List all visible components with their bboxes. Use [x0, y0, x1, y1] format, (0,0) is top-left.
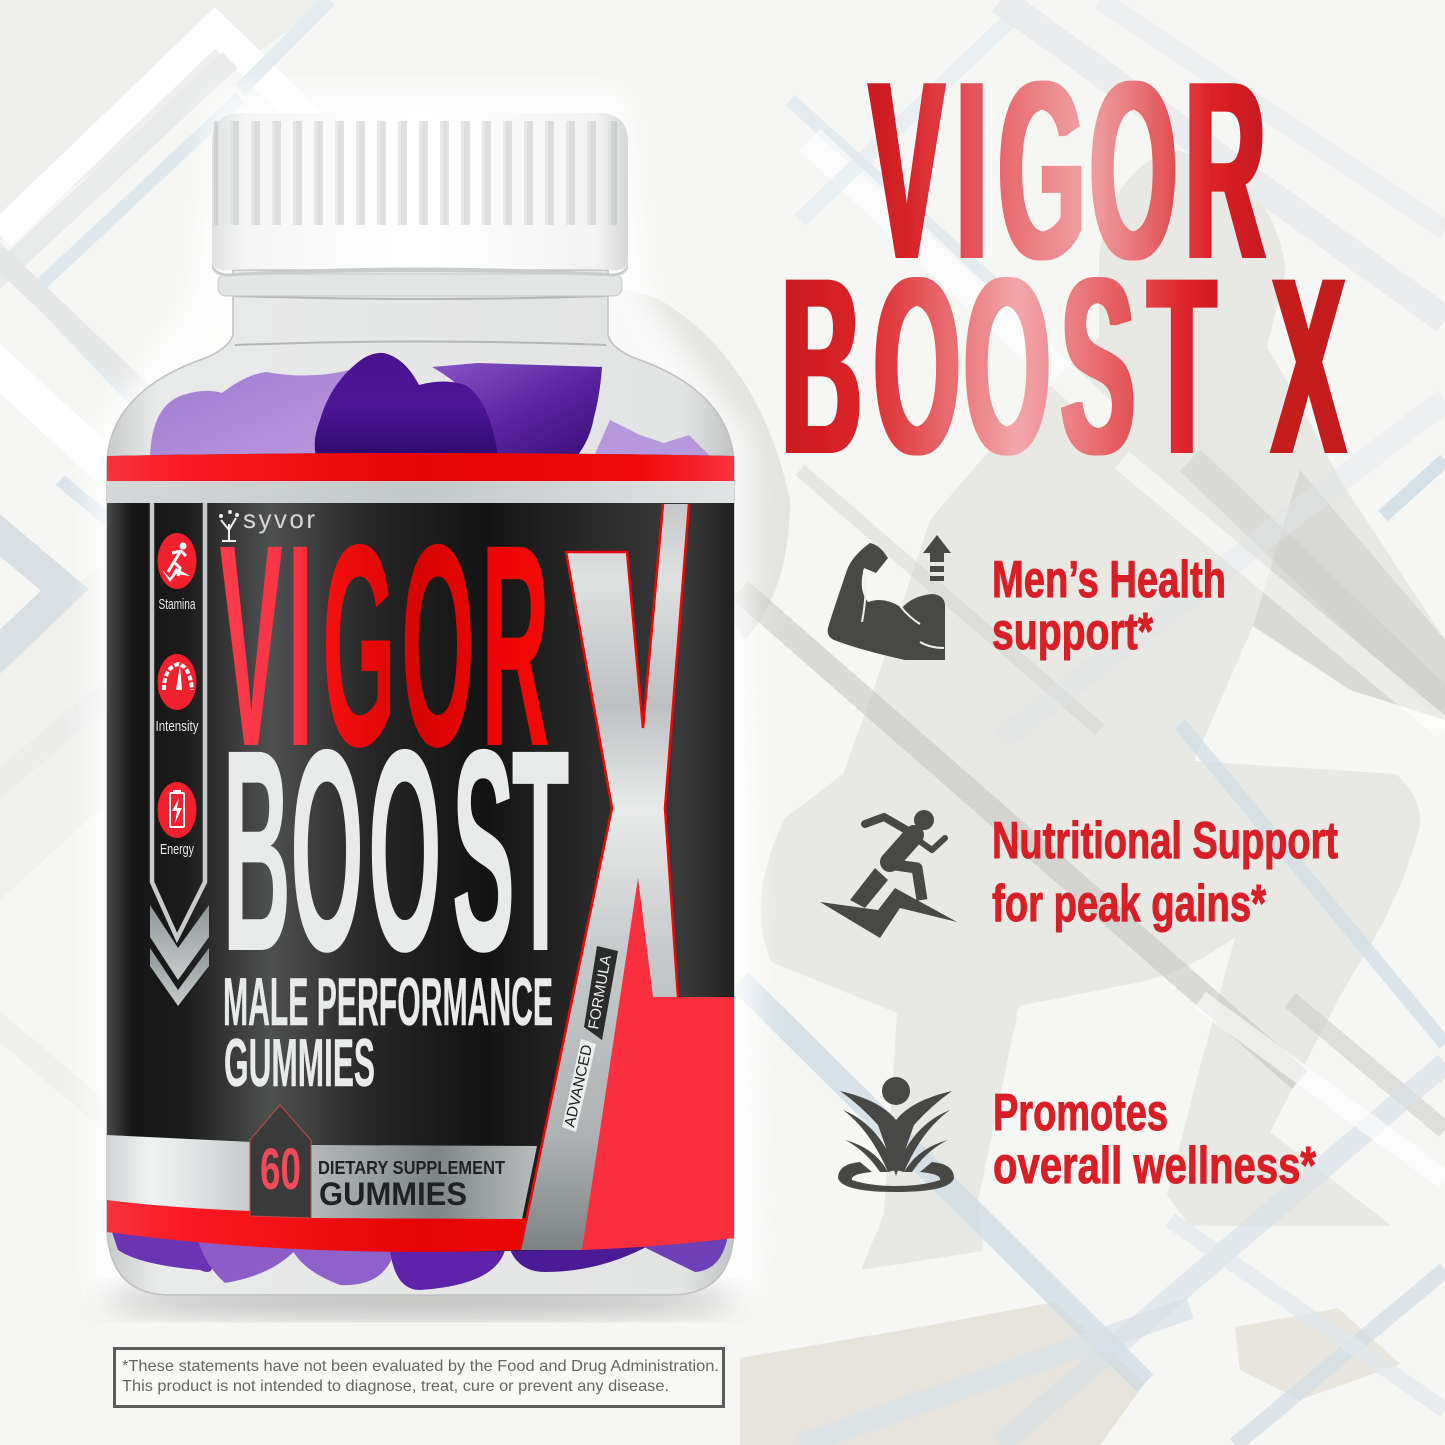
disclaimer box: *These statements have not been evaluated by the Food and Drug Administration. [122, 1358, 719, 1375]
dietary supplement text [318, 1157, 506, 1212]
main title: BOOST X [781, 226, 1346, 507]
left arrow outline panel [152, 503, 205, 938]
red outline of X [520, 504, 689, 1250]
glass rims [233, 296, 608, 345]
foreground diagonal light bands [740, 0, 1445, 1445]
bottle cap [212, 113, 628, 276]
label base black [107, 453, 734, 1252]
purple gummies bottom [112, 1232, 728, 1290]
benefit text: promotes wellness: overall wellness* [993, 1137, 1317, 1195]
icon: runner [820, 810, 957, 938]
label title: boost: BOOST [222, 691, 570, 1012]
main title [781, 28, 1346, 507]
benefit badge: stamina: Stamina [158, 596, 196, 613]
chevrons [150, 905, 209, 1006]
advanced formula tag: ADVANCED [561, 1043, 596, 1129]
dietary supplement text: GUMMIES [319, 1176, 467, 1212]
neck ring [218, 274, 622, 296]
benefit text: men's health [992, 551, 1226, 661]
top red band [107, 453, 734, 481]
purple gummies top [150, 353, 710, 456]
benefit text: promotes wellness [993, 1084, 1317, 1195]
60 count tag: 60 [260, 1137, 301, 1202]
benefit text: men's health: Men’s Health [992, 551, 1226, 609]
benefit badge: intensity: Intensity [156, 718, 199, 735]
benefit text: nutritional support [992, 812, 1338, 933]
bottle product: MALE PERFORMANCE [223, 964, 553, 1040]
bottom silver band left [107, 1135, 252, 1211]
brand logo: syvor [243, 504, 315, 534]
main title: VIGOR [869, 28, 1266, 312]
benefit badge: energy: Energy [160, 841, 194, 858]
background figure silhouette [540, 150, 1445, 1445]
brand logo [219, 504, 315, 541]
advanced formula tag [561, 946, 618, 1132]
60 count tag [250, 1105, 311, 1218]
benefit badge: energy [158, 782, 196, 858]
benefit text: nutritional support: for peak gains* [992, 875, 1267, 933]
benefit text: promotes wellness: Promotes [993, 1084, 1168, 1142]
benefit text: men's health: support* [992, 603, 1154, 661]
bottle product [90, 90, 760, 1316]
top silver band [107, 481, 734, 503]
icon: wellness figure [838, 1077, 954, 1192]
label subtitle: GUMMIES [224, 1025, 375, 1101]
bottom red band [107, 1200, 530, 1252]
advanced formula tag: FORMULA [585, 954, 615, 1031]
benefit badge: intensity [156, 654, 199, 735]
glass jar [107, 270, 734, 1295]
disclaimer box [114, 1348, 724, 1406]
silver X and diagonal bar [520, 504, 689, 1250]
label subtitle [223, 964, 553, 1101]
label title: vigor: VIGOR [219, 486, 550, 807]
bottle halo and shadow [90, 90, 760, 1316]
bottom silver band right [311, 1145, 537, 1219]
disclaimer box: This product is not intended to diagnose, treat, cure or prevent any disease. [122, 1378, 669, 1395]
bottom red area [580, 878, 734, 1250]
dietary supplement text: DIETARY SUPPLEMENT [318, 1157, 506, 1178]
benefit badge: stamina [158, 533, 196, 613]
icon: muscle arm [828, 535, 951, 660]
